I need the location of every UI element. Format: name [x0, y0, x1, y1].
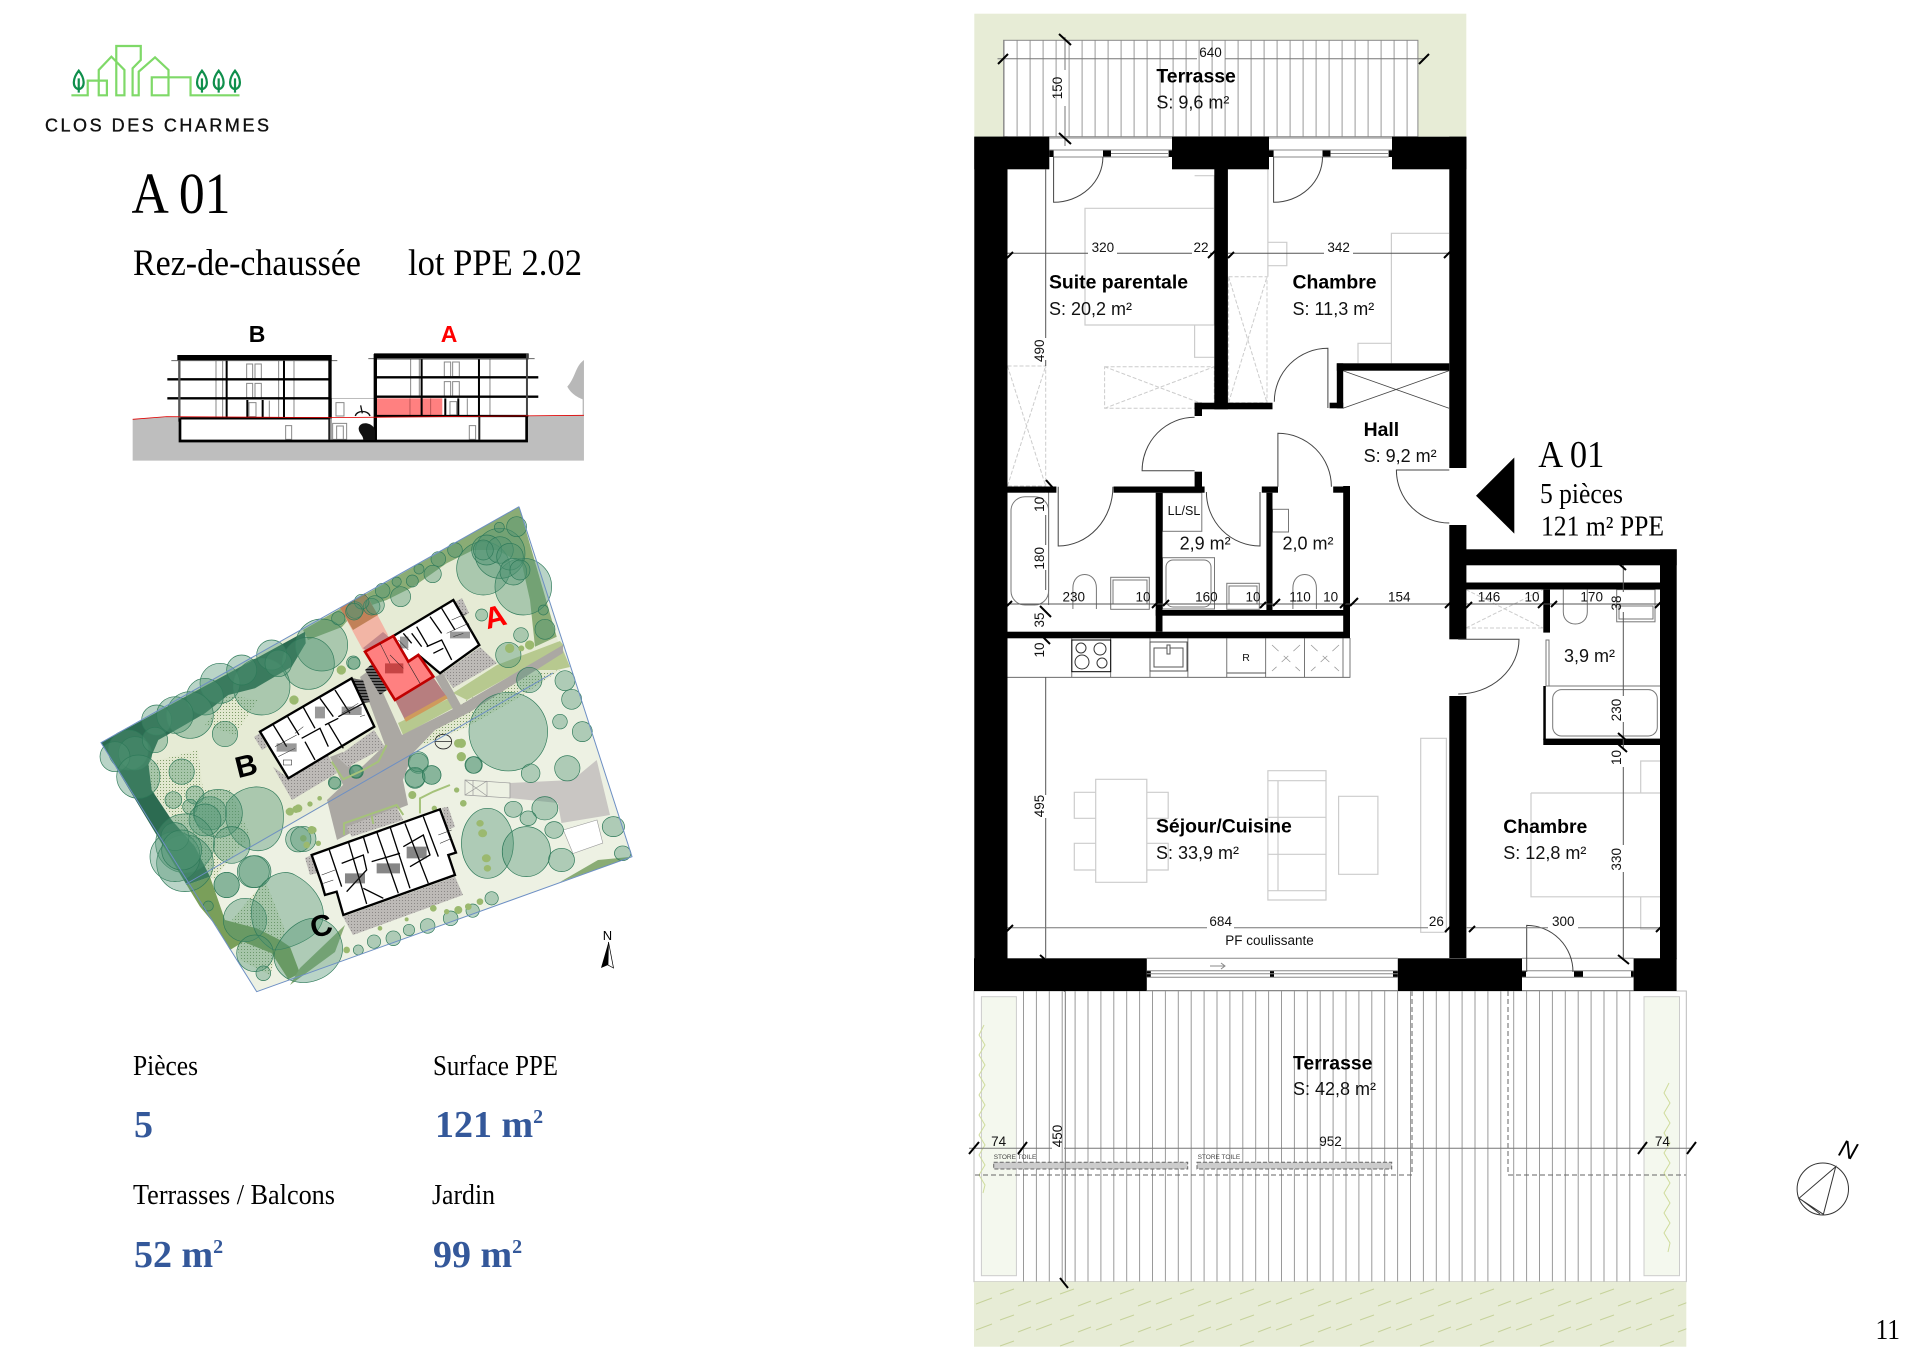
- road: [327, 645, 563, 840]
- trees east: [462, 797, 631, 878]
- stat: Terrasses / Balcons: [133, 1180, 335, 1276]
- room label: Chambre north: S: 11,3 m²: [1292, 299, 1374, 319]
- stats panel: [133, 1051, 558, 1276]
- icon: compass north: N: [1835, 1135, 1861, 1166]
- apartment callout: 121 m² PPE: [1541, 511, 1664, 542]
- dimension numbers: 74: [991, 1134, 1007, 1149]
- site label B: B: [232, 748, 261, 785]
- dimension numbers: 26: [1429, 914, 1444, 929]
- dimension numbers: 640: [1199, 45, 1222, 60]
- dimension numbers: 146: [1478, 590, 1500, 604]
- dimension numbers: 342: [1327, 240, 1350, 255]
- kitchen fittings: [1008, 638, 1350, 677]
- dimension numbers: 10: [1323, 590, 1338, 604]
- dimension numbers: 35: [1032, 612, 1047, 628]
- room label: Séjour/Cuisine: Séjour/Cuisine: [1156, 816, 1292, 838]
- doors: [1054, 157, 1573, 972]
- apartment callout: [1538, 434, 1664, 542]
- stat: Jardin: Jardin: [432, 1180, 495, 1211]
- dimension numbers: 150: [1050, 77, 1065, 99]
- stat: Pièces: Pièces: [133, 1051, 198, 1082]
- stat: Surface PPE: Surface PPE: [433, 1051, 558, 1082]
- room label: Chambre south: Chambre: [1503, 816, 1588, 838]
- dimension numbers: 330: [1609, 848, 1624, 871]
- store bars: STORE TOILE: [994, 1154, 1037, 1161]
- store bars: STORE TOILE: [1198, 1154, 1241, 1161]
- room label: Suite parentale: S: 20,2 m²: [1049, 299, 1132, 319]
- dimension numbers: 22: [1193, 240, 1209, 255]
- stat: Jardin: [432, 1180, 522, 1276]
- room label: Chambre north: [1292, 272, 1377, 319]
- dimension numbers: 490: [1032, 339, 1047, 362]
- dimension numbers: 230: [1063, 590, 1085, 604]
- icon: compass north: [1797, 1135, 1861, 1215]
- dimension numbers: [991, 45, 1670, 1149]
- title: A 01: A 01: [132, 161, 230, 226]
- parking: [465, 760, 610, 854]
- room label: Hall: Hall: [1364, 419, 1399, 441]
- site label A: A: [481, 599, 510, 636]
- trees south-west: [203, 739, 498, 982]
- dimension numbers: 10: [1135, 590, 1151, 604]
- dimension numbers: 10: [1032, 642, 1047, 658]
- stat: Jardin: 2: [512, 1236, 522, 1258]
- room label: Terrasse north: Terrasse: [1156, 66, 1236, 88]
- dimension numbers: 495: [1032, 795, 1047, 817]
- panel: lower terrace: [974, 991, 1686, 1282]
- room label: Suite parentale: [1049, 272, 1188, 319]
- walls: [974, 137, 1677, 991]
- icon: site north arrow: N: [603, 928, 612, 943]
- label B: B: [249, 321, 265, 347]
- icon: houses and trees: [71, 46, 240, 95]
- subtitle: floor: Rez-de-chaussée: [133, 243, 361, 284]
- floor plan: [969, 34, 1696, 1288]
- dimension ticks: [969, 34, 1696, 1288]
- dimension numbers: 450: [1050, 1125, 1065, 1147]
- site plan: [100, 507, 632, 992]
- room label: bathroom 3,9: 3,9 m²: [1564, 646, 1615, 666]
- dimension numbers: PF coulissante: [1225, 933, 1314, 948]
- dimension numbers: 230: [1609, 699, 1624, 721]
- stat: Jardin: 99 m: [433, 1234, 512, 1276]
- stat: Terrasses / Balcons: 2: [213, 1236, 223, 1258]
- dimension numbers: 38: [1609, 595, 1624, 611]
- dimension numbers: 952: [1319, 1134, 1342, 1149]
- stat: Terrasses / Balcons: Terrasses / Balcons: [133, 1180, 335, 1211]
- room label: Séjour/Cuisine: S: 33,9 m²: [1156, 843, 1239, 863]
- panel: top terrace: [974, 14, 1466, 137]
- dimension numbers: 170: [1580, 590, 1603, 604]
- dimension numbers: 320: [1092, 240, 1114, 255]
- room label: Terrasse south: Terrasse: [1293, 1052, 1373, 1074]
- room label: Hall: S: 9,2 m²: [1364, 446, 1437, 466]
- stat: Surface PPE: [433, 1051, 558, 1146]
- panel: lawn strip: [974, 1282, 1686, 1347]
- icon: site north arrow: [601, 928, 614, 968]
- boundary line: [101, 507, 632, 992]
- building A: [365, 600, 479, 700]
- furniture and fixtures: [1008, 169, 1660, 932]
- dimension numbers: 10: [1032, 497, 1047, 512]
- apartment callout: A 01: [1538, 434, 1604, 476]
- dimension numbers: 10: [1245, 590, 1261, 604]
- bathroom fittings: [1011, 492, 1660, 736]
- building C: [312, 809, 456, 915]
- kitchen fittings: R: [1242, 652, 1250, 664]
- room label: Terrasse south: S: 42,8 m²: [1293, 1079, 1376, 1099]
- room label: Terrasse south: [1293, 1052, 1376, 1099]
- stat: Pièces: 5: [134, 1104, 153, 1146]
- site base and bands: [101, 507, 632, 992]
- room label: Hall: [1364, 419, 1437, 466]
- label A: A: [441, 321, 457, 347]
- dimension numbers: 110: [1289, 590, 1311, 604]
- dimension numbers: 300: [1552, 914, 1575, 929]
- dimension numbers: 160: [1195, 590, 1218, 604]
- room label: Terrasse north: [1156, 66, 1236, 112]
- logo wordmark: CLOS DES CHARMES: [45, 116, 269, 136]
- dimension numbers: 154: [1388, 590, 1411, 604]
- logo: Clos des Charmes: [45, 46, 269, 136]
- room label: Chambre north: Chambre: [1292, 272, 1377, 294]
- dimension numbers: 10: [1524, 590, 1540, 604]
- stat: Terrasses / Balcons: 52 m: [134, 1234, 213, 1276]
- page number: 11: [1876, 1315, 1900, 1346]
- trees west: [100, 598, 380, 898]
- stat: Surface PPE: 2: [533, 1106, 543, 1128]
- dimension numbers: 74: [1655, 1134, 1670, 1149]
- arrow: entrance: [1476, 458, 1514, 534]
- terraces: [254, 598, 497, 935]
- trees north-east: [346, 517, 592, 788]
- room label: bathroom 2,9: 2,9 m²: [1180, 533, 1231, 553]
- room label: WC 2,0: 2,0 m²: [1282, 533, 1334, 553]
- dimension numbers: 10: [1609, 750, 1624, 765]
- room label: Terrasse north: S: 9,6 m²: [1156, 92, 1229, 112]
- subtitle: lot: lot PPE 2.02: [408, 243, 582, 284]
- room label: Chambre south: [1503, 816, 1588, 863]
- dimension lines: [969, 34, 1696, 1288]
- section drawing of buildings B and A: [133, 321, 584, 461]
- room label: Séjour/Cuisine: [1156, 816, 1292, 863]
- dimension numbers: LL/SL: [1168, 504, 1200, 518]
- stat: Surface PPE: 121 m: [435, 1104, 533, 1146]
- apartment callout: 5 pièces: [1540, 478, 1623, 510]
- store bars: [994, 1154, 1392, 1169]
- dimension numbers: 180: [1032, 547, 1047, 570]
- room label: Suite parentale: Suite parentale: [1049, 272, 1188, 294]
- building B: [260, 678, 374, 778]
- site label C: C: [307, 908, 336, 945]
- room label: Chambre south: S: 12,8 m²: [1503, 843, 1586, 863]
- dimension numbers: 684: [1209, 914, 1232, 929]
- stat: Pièces: [133, 1051, 198, 1146]
- windows: [1049, 138, 1634, 990]
